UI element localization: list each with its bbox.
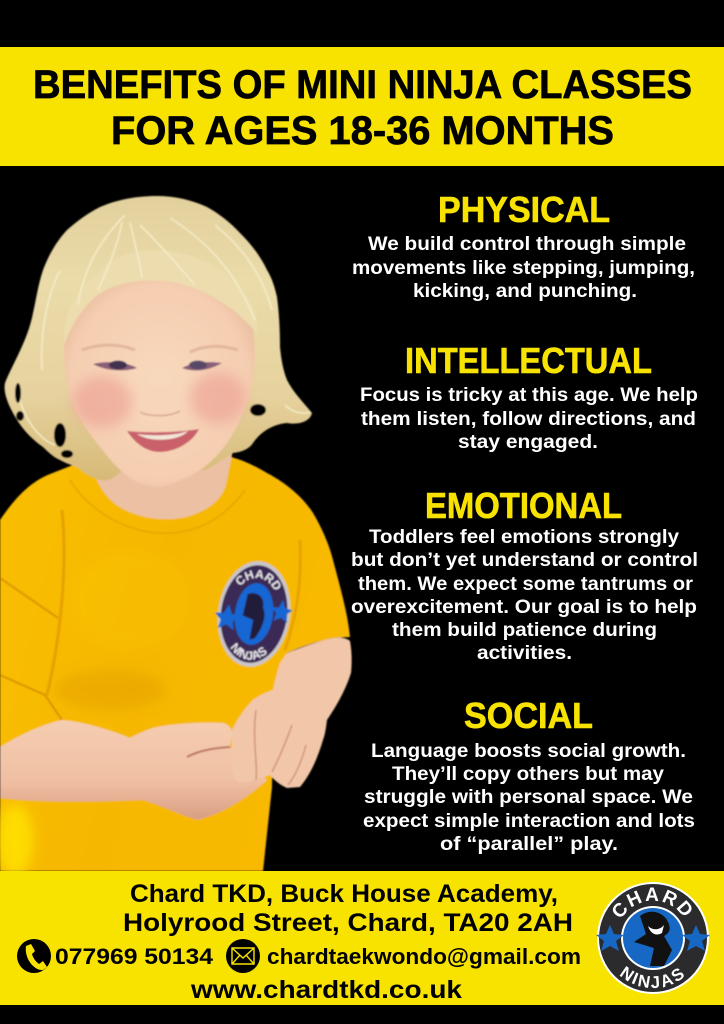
- section: social: Language boosts social growth.: [371, 740, 686, 762]
- neck: [90, 440, 235, 519]
- nose: [139, 385, 181, 415]
- t-shirt: [0, 455, 350, 871]
- photo: smiling toddler in yellow t-shirt: [0, 195, 353, 871]
- section: social: of “parallel” play.: [440, 833, 618, 855]
- icon: phone: [17, 939, 51, 973]
- logo: Chard Ninjas: NINJAS: [620, 966, 684, 988]
- forearm and hand, right: [232, 638, 352, 788]
- face: [64, 278, 255, 487]
- section: physical: [352, 189, 695, 302]
- phone number: 077969 50134: [55, 944, 214, 969]
- logo: Chard Ninjas: CHARD: [612, 888, 692, 917]
- footer band: [0, 871, 724, 1005]
- section: social: They’ll copy others but may: [392, 763, 664, 785]
- section: physical: kicking, and punching.: [413, 280, 637, 302]
- section: emotional: them build patience during: [392, 619, 657, 641]
- section: physical: We build control through simple: [368, 233, 686, 255]
- section: intellectual: [360, 340, 698, 453]
- website: www.chardtkd.co.uk: [190, 976, 462, 1004]
- section: intellectual: them listen, follow directions, and: [361, 408, 696, 430]
- section: emotional: overexcitement. Our goal is to help: [351, 596, 697, 618]
- icon: envelope: [226, 939, 260, 973]
- fringe: [64, 250, 258, 345]
- cheeks: [72, 376, 132, 428]
- eyes: [93, 362, 137, 370]
- section: social: expect simple interaction and lots: [363, 810, 695, 832]
- shirt shading: [0, 480, 300, 876]
- section: emotional: them. We expect some tantrums or: [358, 573, 693, 595]
- logo: Chard Ninjas: [596, 882, 710, 994]
- forearm and hand, left: [0, 720, 267, 820]
- section: social: struggle with personal space. We: [364, 786, 693, 808]
- title banner: FOR AGES 18-36 MONTHS: [111, 109, 614, 153]
- footer address: Chard TKD, Buck House Academy,: [130, 880, 558, 908]
- email address: chardtaekwondo@gmail.com: [267, 944, 581, 969]
- footer address: Holyrood Street, Chard, TA20 2AH: [123, 909, 573, 937]
- hair gaps: [15, 383, 266, 458]
- section: intellectual: stay engaged.: [458, 431, 598, 453]
- section: social: SOCIAL: [464, 695, 593, 736]
- section: emotional: activities.: [477, 642, 572, 664]
- section: intellectual: Focus is tricky at this age. We help: [360, 384, 698, 406]
- section: emotional: [351, 485, 698, 664]
- section: intellectual: INTELLECTUAL: [405, 340, 652, 381]
- shirt badge: NINJAS: [230, 642, 268, 662]
- title banner: [0, 47, 724, 166]
- section: emotional: but don’t yet understand or control: [351, 549, 698, 571]
- hair back: [5, 196, 312, 481]
- footer address: [123, 880, 573, 937]
- section: emotional: EMOTIONAL: [425, 485, 622, 526]
- section: physical: PHYSICAL: [438, 189, 610, 230]
- hair highlights: [20, 215, 310, 445]
- section: social: [363, 695, 695, 855]
- section: emotional: Toddlers feel emotions strongly: [369, 526, 679, 548]
- shirt badge: [214, 560, 294, 668]
- shirt badge: CHARD: [235, 568, 282, 591]
- smile: [127, 429, 199, 452]
- section: physical: movements like stepping, jumping,: [352, 257, 695, 279]
- title banner: BENEFITS OF MINI NINJA CLASSES: [33, 63, 692, 107]
